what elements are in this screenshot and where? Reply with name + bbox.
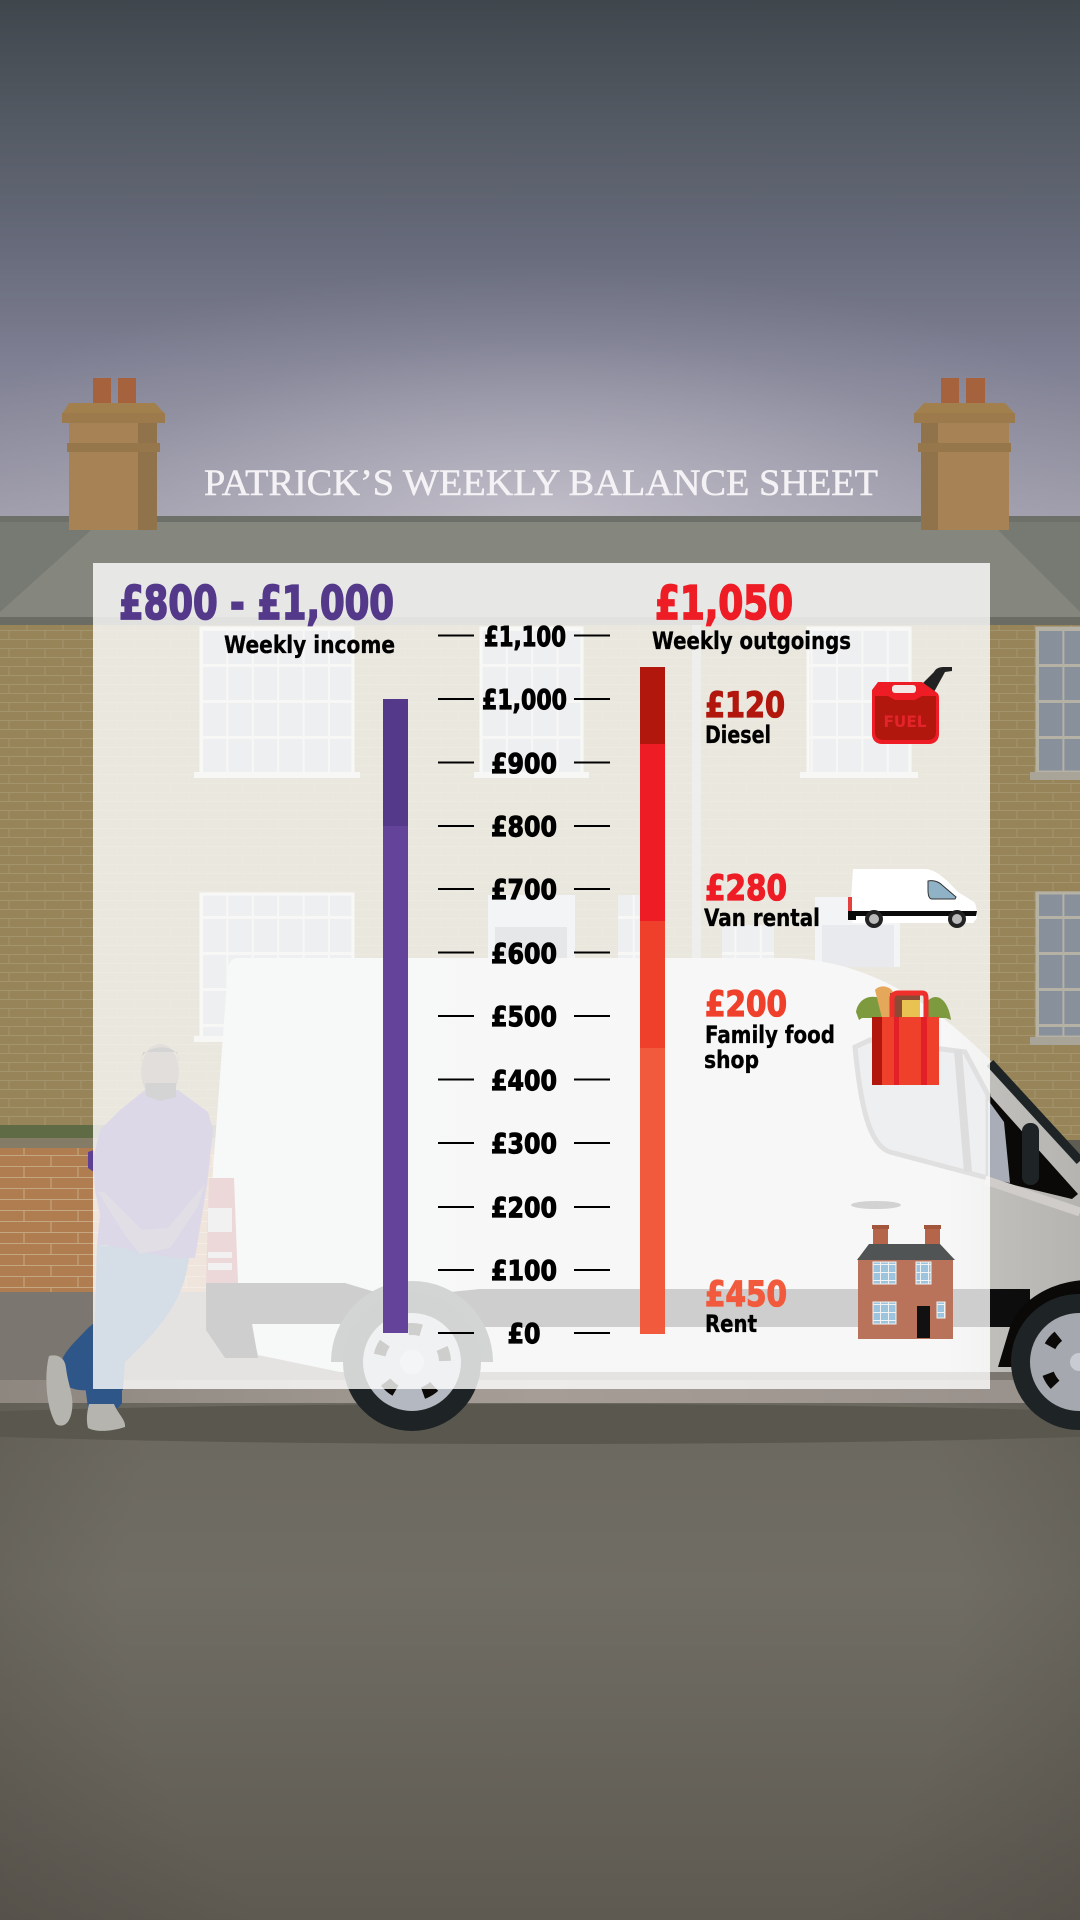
income label: Weekly income [224,631,395,659]
garden wall [0,1125,1080,1384]
icon: fuel can: FUEL [884,712,926,731]
person leaning on van [46,1044,213,1431]
item: van rental [704,869,820,932]
central money scale: £700 [491,873,557,906]
outgoings amount: £1,050 [655,576,793,630]
income heading [119,576,395,659]
item: van rental: Van rental [704,904,820,932]
outgoings label: Weekly outgoings [652,627,851,655]
central money scale: £900 [491,747,557,780]
road [0,1403,1080,1920]
chimney right [914,378,1015,530]
item: diesel: £120 [705,686,785,726]
van rear light [206,1178,238,1283]
central money scale: £1,100 [484,620,566,653]
item: family food shop: shop [704,1046,759,1074]
van door handle [851,1201,901,1209]
big white van [206,958,1080,1431]
item: family food shop: £200 [705,985,787,1025]
pavement [0,1380,1080,1404]
central money scale: £300 [491,1127,557,1160]
van cab window [855,1040,1080,1212]
title: PATRICK’S WEEKLY BALANCE SHEET [204,463,878,504]
central money scale: £200 [491,1191,557,1224]
icon: house [857,1225,955,1339]
outgoings stacked bar [640,667,665,1334]
icon: white van [848,869,977,928]
icon: grocery bag [856,986,951,1085]
building windows [194,625,1080,1045]
item: diesel [705,686,785,749]
central money scale: £500 [491,1000,557,1033]
sky [0,0,1080,520]
panel: balance sheet backing [93,563,990,1389]
roof [0,516,1080,626]
chimney left [62,378,165,530]
central money scale: £0 [508,1317,540,1350]
central money scale: £100 [491,1254,557,1287]
item: van rental: £280 [705,869,787,909]
central money scale: £800 [491,810,557,843]
income bar [383,699,408,1333]
outgoings heading [652,576,851,655]
brick building [0,625,1080,1140]
central money scale [438,620,610,1350]
item: family food shop: Family food [705,1021,835,1049]
icon: fuel can [872,667,952,744]
central money scale: £1,000 [482,683,567,716]
van bumper and rubbing strip [206,1283,1030,1358]
central money scale: £600 [491,937,557,970]
item: rent [705,1275,787,1338]
van rear wheel [331,1281,493,1431]
item: diesel: Diesel [705,721,771,749]
item: family food shop [704,985,835,1074]
item: rent: Rent [705,1310,757,1338]
item: rent: £450 [705,1275,787,1315]
central money scale: £400 [491,1064,557,1097]
van front wheel [998,1280,1080,1430]
income amount: £800 - £1,000 [119,576,394,630]
